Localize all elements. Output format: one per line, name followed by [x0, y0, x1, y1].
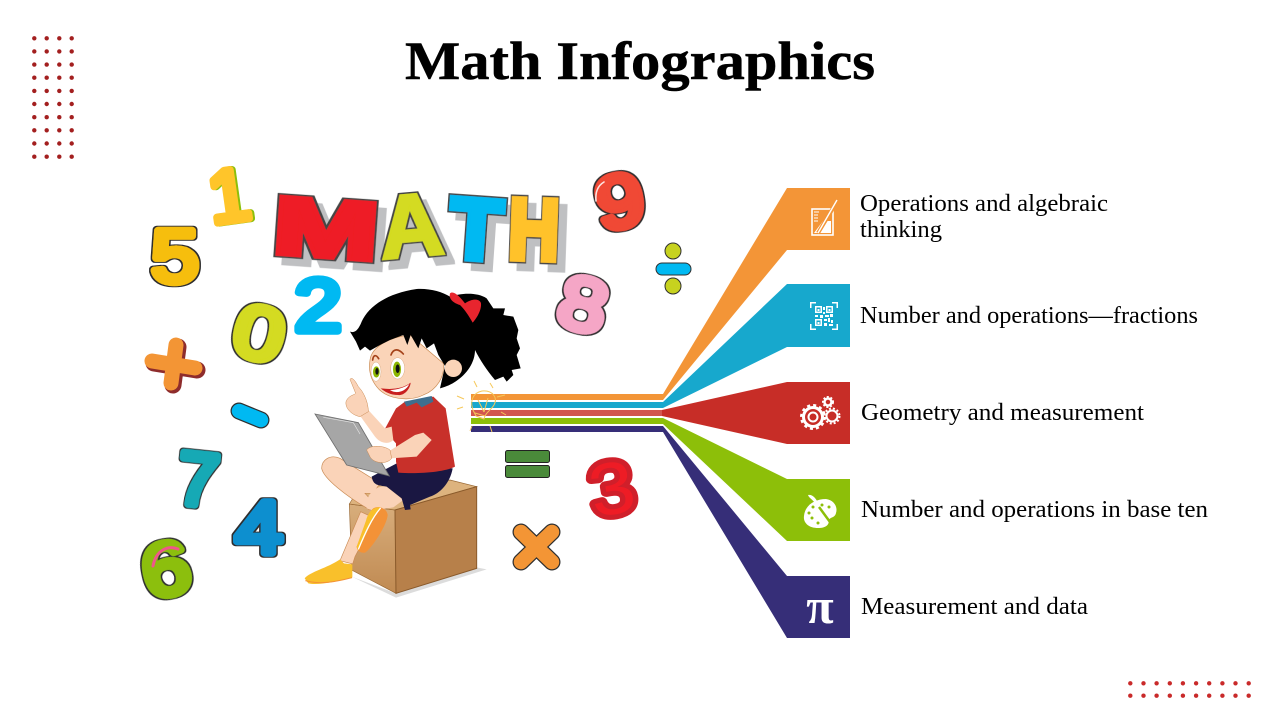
label: operations and algebraic thinking [860, 191, 1108, 243]
lower leg and yellow shoe [305, 512, 375, 584]
icon: notebook and pencil [812, 200, 838, 235]
illustration: number 9: 9 [589, 157, 650, 246]
label: measurement and data: Measurement and data [861, 594, 1088, 620]
illustration: number 0: 0 [225, 288, 293, 380]
ribbon: green [471, 418, 850, 541]
illustration: girl sitting on box with tablet [305, 289, 521, 598]
illustration: number 1: 1 [203, 152, 255, 239]
illustration: division sign [656, 243, 691, 294]
illustration: MATH lettering: H [507, 183, 561, 278]
illustration: minus sign [239, 411, 261, 420]
box [349, 480, 487, 598]
illustration: equals sign [506, 450, 550, 478]
illustration: number 2: 2 [294, 264, 342, 347]
label: geometry: Geometry and measurement [861, 400, 1144, 426]
illustration: number 1: 1 [205, 152, 257, 239]
ribbon: orange [471, 188, 850, 400]
ribbon: red bar [471, 410, 663, 416]
illustration: plus sign [152, 345, 197, 385]
tablet [315, 414, 389, 476]
illustration: MATH lettering [271, 173, 561, 280]
icon: gears [802, 397, 840, 428]
tapping arm [367, 433, 432, 463]
icon: QR code [810, 302, 838, 330]
illustration: MATH lettering: A [375, 173, 447, 278]
illustration: MATH lettering: T [447, 181, 505, 280]
ribbon: navy [471, 426, 850, 638]
label: operations and algebraic thinking: thinking [860, 217, 942, 243]
shorts [372, 463, 453, 510]
head and hair [350, 289, 521, 399]
ribbon bars and fans [471, 188, 850, 638]
illustration: number 6: 6 [134, 524, 198, 615]
label: fractions: Number and operations—fractions [860, 303, 1198, 329]
illustration: number 7: 7 [173, 436, 223, 523]
pointing arm [346, 378, 393, 443]
decorative dot grid: top left [32, 36, 74, 159]
ribbon: red fan [662, 382, 850, 444]
decorative dot grid: bottom right [1128, 681, 1251, 698]
illustration: multiplication sign [521, 532, 552, 562]
icon: light bulb sketch [457, 381, 506, 432]
illustration: number 8: 8 [550, 259, 616, 350]
orange shoe [357, 507, 388, 553]
illustration: number 4: 4 [235, 486, 283, 569]
label: operations and algebraic thinking: Operations and algebraic [860, 191, 1108, 217]
ribbon: blue [471, 284, 850, 408]
illustration: MATH lettering: M [271, 181, 381, 277]
upper leg [322, 457, 403, 511]
title: Math Infographics [405, 31, 875, 91]
red shirt [384, 396, 455, 473]
illustration: number 3: 3 [583, 445, 641, 533]
illustration: number 5: 5 [151, 215, 199, 298]
icon: pi symbol: π [806, 578, 834, 634]
icon: paint palette [804, 495, 837, 528]
label: base ten: Number and operations in base ten [861, 497, 1208, 523]
